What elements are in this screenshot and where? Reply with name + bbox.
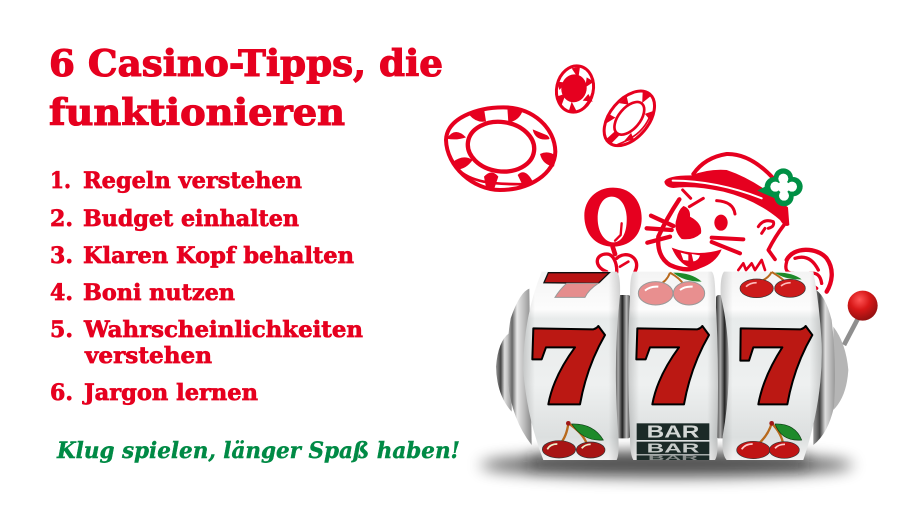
reel 1 [523,272,620,460]
tip 3: Klaren Kopf behalten [83,243,354,269]
lever [844,291,878,345]
machine shadow [480,452,853,478]
tips list [50,168,363,406]
top seven [544,273,609,297]
top cherries pale [638,273,705,305]
mascot: beaver with hat [647,154,832,292]
mascot face [647,190,784,270]
tip 4: Boni nutzen [83,280,235,306]
tip 5: 5. [50,317,73,343]
cherries [737,421,802,459]
tip 2: Budget einhalten [83,206,299,232]
slot machine [480,272,878,478]
bar symbols: BAR [647,422,700,442]
title: 6 Casino-Tipps, die [49,43,443,85]
title: funktionieren [49,92,345,134]
icon: magnifying glass [584,188,642,273]
right chrome cap [813,288,848,445]
reel 3 [721,272,822,460]
tip 1: 1. [50,168,71,194]
title [49,43,443,134]
big seven [740,326,812,404]
tip 3: 3. [50,243,73,269]
tip 4: 4. [50,280,73,306]
icon: four-leaf clover [757,168,803,206]
tip 1: Regeln verstehen [83,168,302,194]
bar symbols [637,422,709,462]
top cherries [740,272,805,298]
reel 2 [628,272,718,462]
tip 6: 6. [50,380,73,406]
big seven [636,326,709,404]
big seven [532,326,605,404]
bar symbols: BAR [647,441,700,456]
mascot paw [786,250,832,292]
tip 5: verstehen [84,343,212,369]
tip 2: 2. [50,206,73,232]
icon: large poker chip [446,107,556,190]
slogan: Klug spielen, länger Spaß haben! [56,438,460,464]
axles [614,295,733,438]
icon: tilted poker chip [594,81,665,155]
icon: small filled poker chip [552,62,598,116]
left chrome cap [496,289,532,445]
mascot hat [664,154,789,226]
tip 5 [50,317,363,369]
red line illustration [446,62,832,292]
tip 5: Wahrscheinlichkeiten [83,317,363,343]
tip 6: Jargon lernen [82,380,258,406]
bar symbols: BAR [648,456,701,462]
cherries [542,421,605,458]
